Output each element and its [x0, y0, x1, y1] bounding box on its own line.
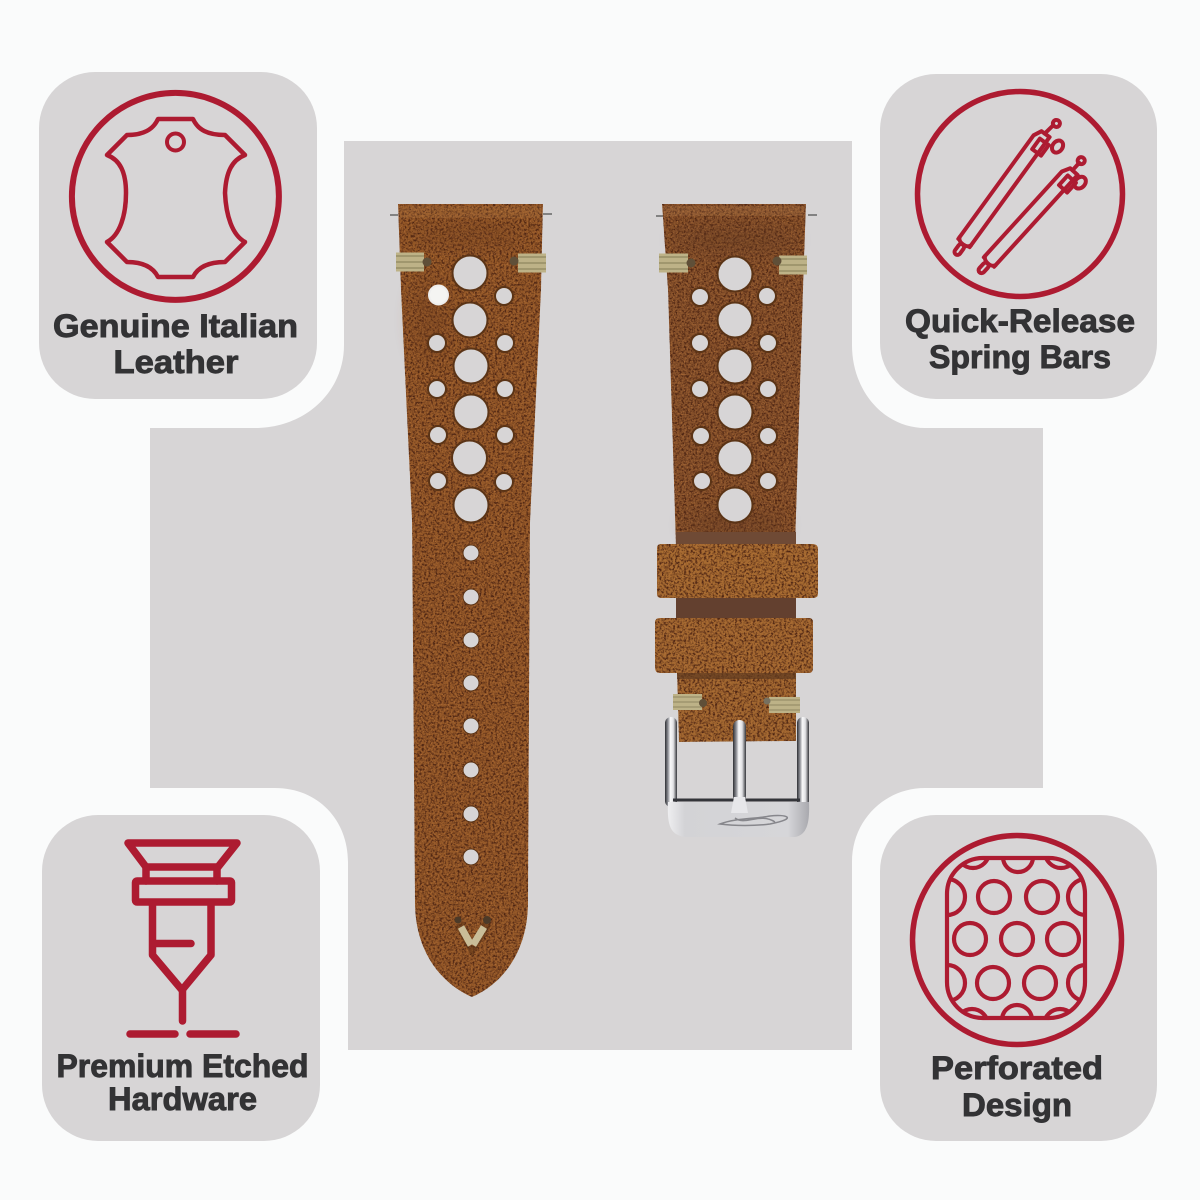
keeper upper — [657, 544, 818, 598]
long strap leather body — [398, 204, 543, 997]
icon: perforation pattern — [912, 836, 1122, 1044]
short strap with keepers and buckle — [655, 204, 818, 837]
stitching short strap bottom — [673, 697, 800, 710]
panel: genuine italian leather — [39, 72, 317, 399]
perforation holes — [428, 256, 514, 865]
short strap upper leather — [662, 204, 806, 548]
top edge highlight short strap — [664, 206, 804, 216]
icon: spring bars — [918, 92, 1122, 296]
heading: premium etched hardware: Premium Etched — [56, 1048, 308, 1084]
heading: genuine italian leather: Leather — [114, 344, 238, 380]
heading: genuine italian leather: Genuine Italian — [53, 308, 298, 344]
heading: perforated design: Design — [962, 1087, 1072, 1123]
heading: genuine italian leather — [53, 308, 298, 380]
heading: quick-release spring bars: Spring Bars — [929, 339, 1111, 375]
heading: premium etched hardware: Hardware — [108, 1081, 257, 1117]
short strap lower leather — [677, 672, 796, 742]
dark strap seen above upper keeper — [676, 532, 796, 546]
heading: perforated design — [931, 1050, 1103, 1123]
stitching — [396, 256, 546, 948]
heading: perforated design: Perforated — [931, 1050, 1103, 1086]
top edge highlight — [400, 206, 541, 218]
panel: perforated design — [880, 815, 1157, 1141]
perforation holes short strap — [691, 256, 777, 522]
long strap with perforations — [390, 204, 552, 997]
icon: laser etching nozzle — [128, 843, 237, 1034]
gap between keepers — [676, 598, 796, 620]
heading: quick-release spring bars — [905, 303, 1135, 375]
keeper lower — [655, 618, 813, 673]
background panel — [150, 141, 1043, 1050]
buckle — [665, 717, 809, 837]
panel: quick-release spring bars — [880, 74, 1157, 399]
keeper shadow — [677, 673, 796, 679]
leather shading — [412, 221, 525, 365]
buckle pin — [720, 720, 787, 826]
heading: quick-release spring bars: Quick-Release — [905, 303, 1135, 339]
short strap shading — [675, 226, 795, 541]
heading: premium etched hardware — [56, 1048, 308, 1117]
panel: premium etched hardware — [42, 815, 320, 1141]
icon: leather hide — [72, 93, 279, 300]
stitching short strap top — [659, 256, 807, 271]
